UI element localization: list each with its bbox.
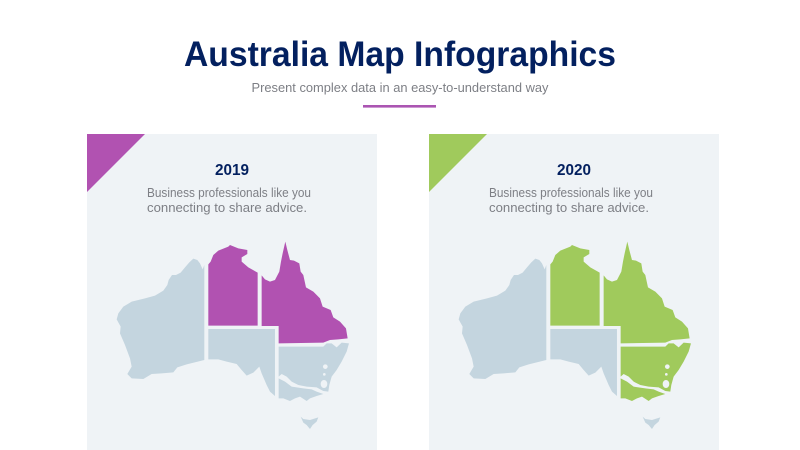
description line two 2019: connecting to share advice. xyxy=(147,201,307,215)
description 2020: Business professionals like you xyxy=(489,186,653,200)
Victoria xyxy=(621,378,665,401)
panel background 2019 xyxy=(87,134,377,450)
Northern Territory xyxy=(550,245,600,326)
year heading 2020: 2020 xyxy=(557,162,591,179)
panel background 2020 xyxy=(429,134,719,450)
coastal islands xyxy=(663,364,670,388)
corner triangle 2020 xyxy=(429,134,487,192)
description line two 2020: connecting to share advice. xyxy=(489,201,649,215)
map of Australia 2020 xyxy=(459,242,691,429)
Queensland xyxy=(604,242,690,343)
Western Australia xyxy=(117,259,204,379)
description 2019: Business professionals like you xyxy=(147,186,311,200)
South Australia xyxy=(550,329,617,396)
Tasmania xyxy=(643,417,660,429)
South Australia xyxy=(208,329,275,396)
title: Australia Map Infographics xyxy=(184,35,616,74)
Tasmania xyxy=(301,417,318,429)
corner triangle 2019 xyxy=(87,134,145,192)
Northern Territory xyxy=(208,245,258,326)
map of Australia 2019 xyxy=(117,242,349,429)
New South Wales xyxy=(279,343,349,392)
Queensland xyxy=(262,242,348,343)
subtitle: Present complex data in an easy-to-understand way xyxy=(252,80,549,95)
title underline xyxy=(363,105,436,108)
coastal islands xyxy=(321,364,328,388)
panel: 2019 xyxy=(87,134,377,450)
panel: 2020 xyxy=(429,134,719,450)
New South Wales xyxy=(621,343,691,392)
Victoria xyxy=(279,378,323,401)
year heading 2019: 2019 xyxy=(215,162,249,179)
Western Australia xyxy=(459,259,546,379)
